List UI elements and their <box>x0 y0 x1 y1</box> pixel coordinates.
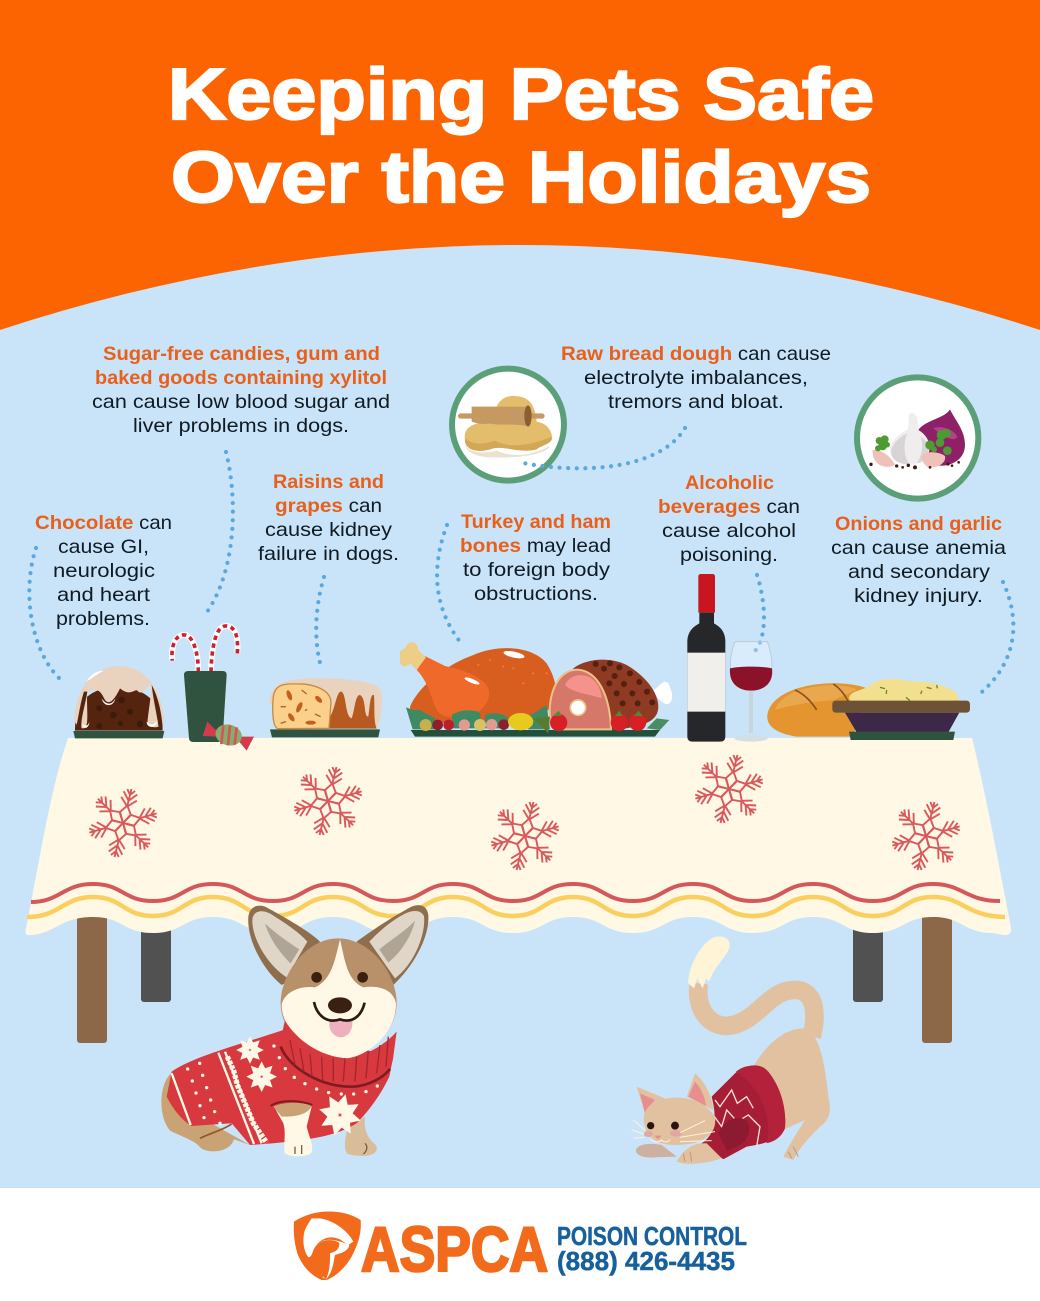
tablecloth <box>26 738 1011 935</box>
text: raisins and grapes: grapes can <box>275 495 382 517</box>
snowflakes on tablecloth <box>81 747 968 878</box>
food: bread loaf <box>767 683 867 737</box>
text: alcoholic beverages: beverages can <box>658 496 800 518</box>
title <box>168 55 874 218</box>
text: chocolate: and heart <box>57 584 151 606</box>
dotted leader: turkey bones <box>437 525 461 643</box>
dotted leader: xylitol <box>207 452 233 612</box>
text: alcoholic beverages: poisoning. <box>680 544 778 566</box>
text: xylitol <box>92 343 390 437</box>
text: raisins and grapes: Raisins and <box>273 471 384 493</box>
text: raisins and grapes: failure in dogs. <box>258 543 399 565</box>
text: turkey and ham bones: Turkey and ham <box>461 511 611 533</box>
title: Over the Holidays <box>171 138 871 218</box>
text: xylitol: can cause low blood sugar and <box>92 391 390 413</box>
dotted leader: bread dough <box>518 428 685 468</box>
logo: ASPCA shield <box>294 1211 361 1280</box>
text: chocolate <box>35 512 172 630</box>
logo: poison control heading: POISON CONTROL <box>557 1221 747 1251</box>
text: xylitol: Sugar-free candies, gum and <box>103 343 380 365</box>
title: Keeping Pets Safe <box>168 55 874 135</box>
text: chocolate: problems. <box>56 608 150 630</box>
food: candy canes in green cup <box>172 626 254 751</box>
text: onions and garlic: kidney injury. <box>854 585 983 607</box>
food: roast turkey <box>400 642 660 737</box>
text: chocolate: neurologic <box>53 560 155 582</box>
text: onions and garlic: can cause anemia <box>831 537 1006 559</box>
text: alcoholic beverages <box>658 472 800 566</box>
dotted leader: chocolate <box>29 548 60 679</box>
orange header band <box>0 0 1040 330</box>
food: wine bottle <box>687 574 725 742</box>
text: alcoholic beverages: cause alcohol <box>662 520 796 542</box>
text: xylitol: liver problems in dogs. <box>133 415 349 437</box>
footer band <box>0 1188 1040 1301</box>
text: chocolate: Chocolate can <box>35 512 172 534</box>
text: raw bread dough: electrolyte imbalances, <box>584 367 808 389</box>
text: turkey and ham bones <box>460 511 611 605</box>
text: raw bread dough <box>561 343 831 413</box>
icon: onions and garlic circle <box>857 377 978 499</box>
text: alcoholic beverages: Alcoholic <box>685 472 774 494</box>
table legs <box>77 900 952 1043</box>
text: onions and garlic: and secondary <box>848 561 990 583</box>
dotted leader: alcohol <box>755 575 764 651</box>
food: fruit cake loaf <box>269 678 382 737</box>
logo: ASPCA wordmark: ASPCA <box>361 1215 548 1285</box>
text: raw bread dough: Raw bread dough can cause <box>561 343 831 365</box>
text: raw bread dough: tremors and bloat. <box>608 391 784 413</box>
dotted leader: raisins <box>316 577 324 670</box>
text: raisins and grapes <box>258 471 399 565</box>
food: glazed ham <box>533 660 672 733</box>
text: turkey and ham bones: obstructions. <box>474 583 598 605</box>
text: chocolate: cause GI, <box>58 536 149 558</box>
text: onions and garlic: Onions and garlic <box>835 513 1002 535</box>
illustration: cat in red sweater <box>632 936 830 1164</box>
illustration: corgi in red sweater <box>161 905 428 1156</box>
icon: bread dough circle <box>452 369 564 481</box>
food: chocolate pudding <box>73 666 164 738</box>
text: turkey and ham bones: to foreign body <box>463 559 610 581</box>
food: glass of red wine <box>730 642 772 742</box>
food: mashed potatoes in bowl <box>832 679 970 740</box>
text: onions and garlic <box>831 513 1006 607</box>
dotted leader: onions <box>977 582 1013 696</box>
logo: phone number: (888) 426-4435 <box>557 1246 735 1276</box>
text: turkey and ham bones: bones may lead <box>460 535 611 557</box>
text: raisins and grapes: cause kidney <box>265 519 392 541</box>
text: xylitol: baked goods containing xylitol <box>95 367 387 389</box>
